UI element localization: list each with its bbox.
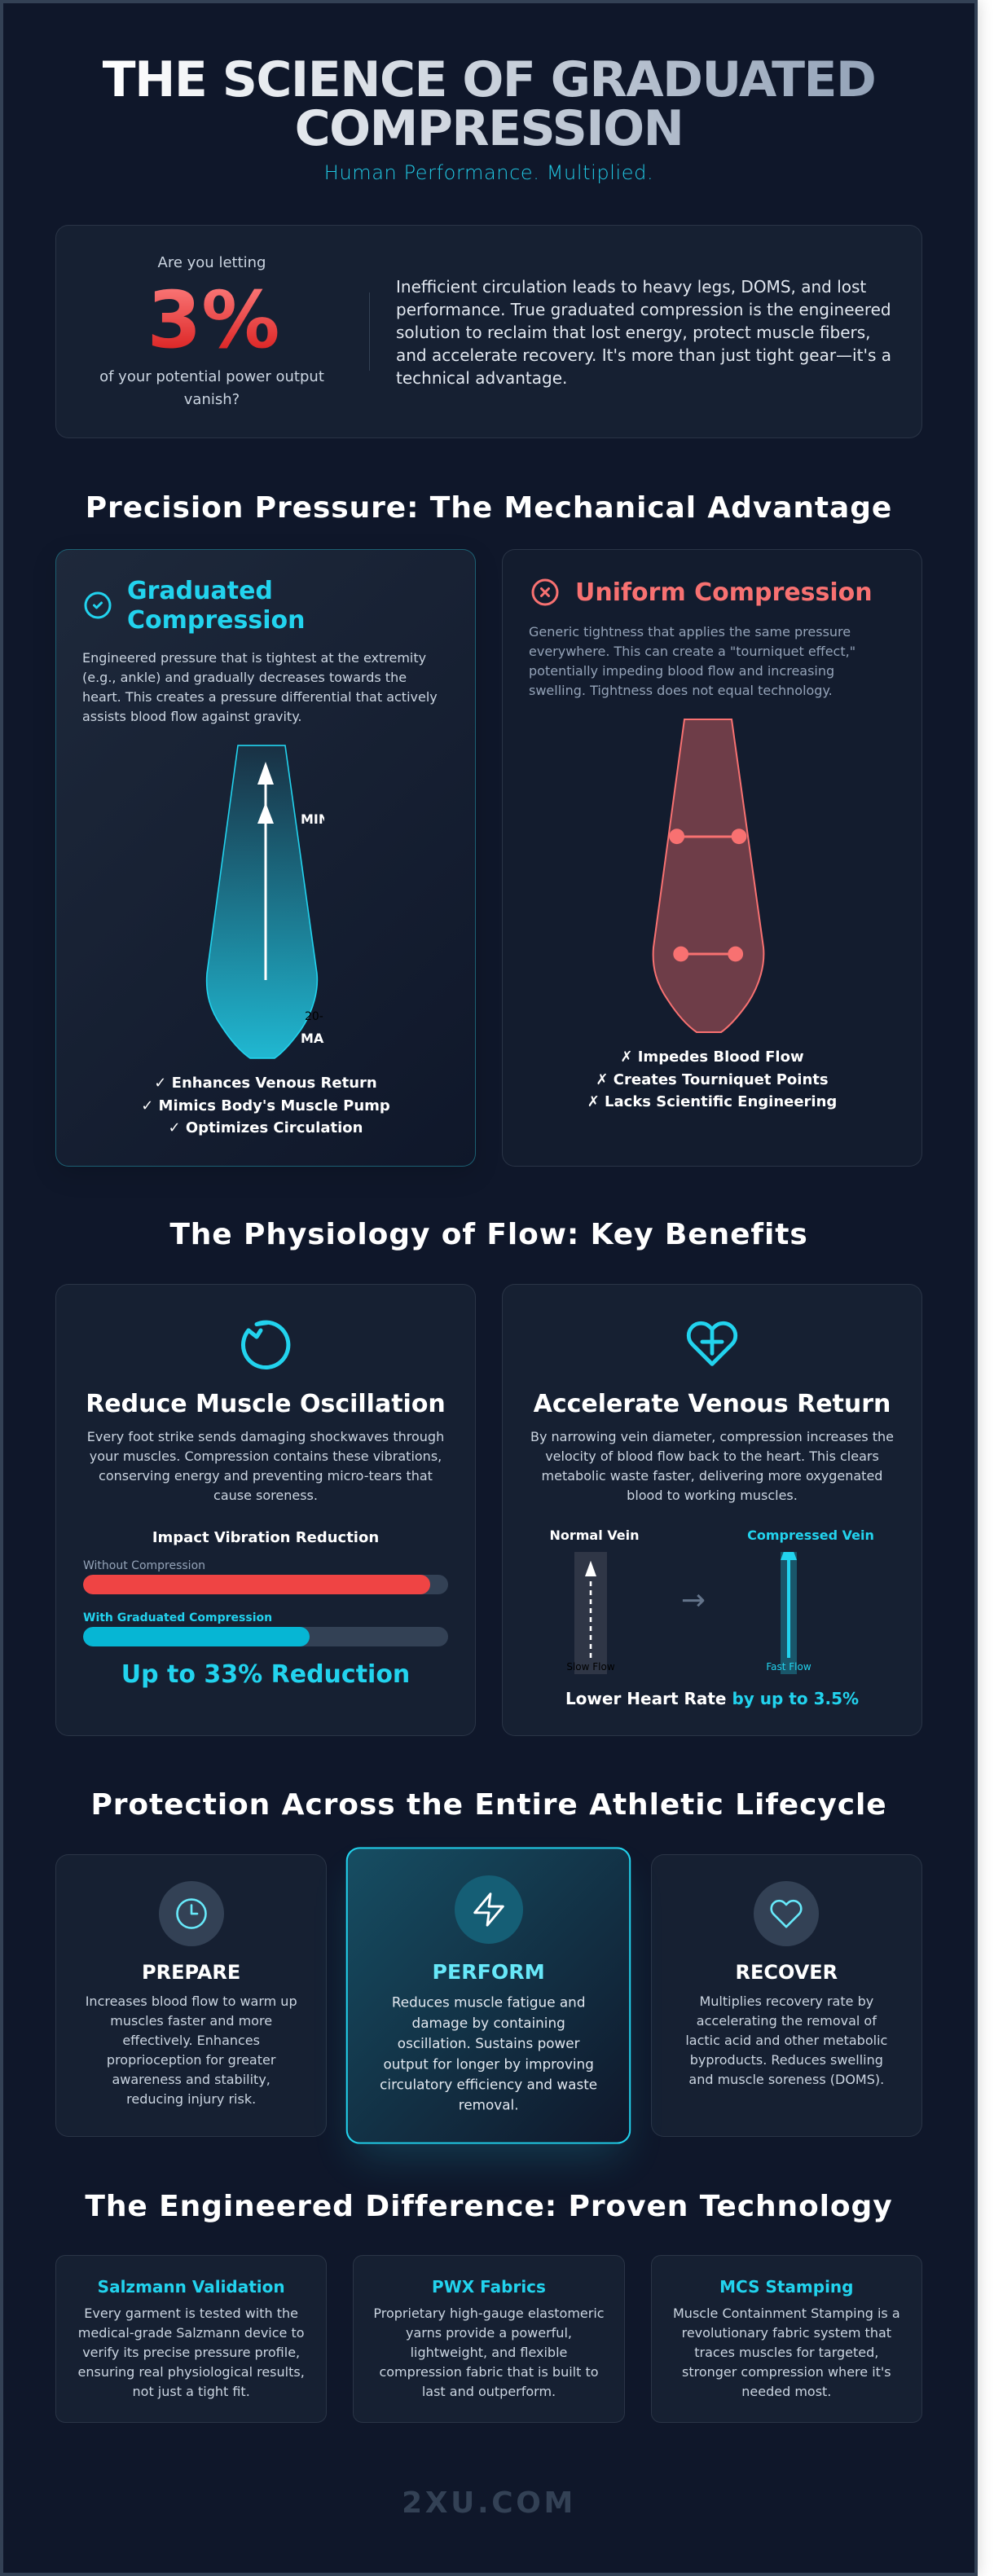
bar: without compression (83, 1575, 448, 1594)
heading: prepare: PREPARE (142, 1961, 240, 1984)
panel: graduated compression (55, 549, 476, 1167)
icon: lightning bolt (455, 1875, 523, 1944)
label: with graduated compression: With Graduated Compression (83, 1611, 272, 1624)
panel: salzmann validation (55, 2255, 327, 2423)
list: uniform drawbacks: ✗ Creates Tourniquet Points (596, 1071, 829, 1088)
text: oscillation description: Every foot strike sends damaging shockwaves through (87, 1429, 444, 1444)
text: power output question (99, 368, 324, 408)
text: venous description: By narrowing vein diameter, compression increases the (530, 1429, 894, 1444)
heading: mcs stamping: MCS Stamping (719, 2277, 854, 2297)
text: uniform description: swelling. Tightness does not equal technology. (529, 683, 833, 698)
icon: oscillation circle (241, 1320, 290, 1369)
text: prepare description: reducing injury risk. (126, 2091, 256, 2107)
compressed vein (766, 1552, 811, 1674)
text: recover description: Multiplies recovery rate by (699, 1994, 873, 2009)
normal vein (566, 1552, 615, 1674)
text: prepare description: effectively. Enhances (122, 2033, 260, 2048)
label: normal vein: Normal Vein (549, 1528, 640, 1543)
heading: engineered difference: The Engineered Difference: Proven Technology (85, 2190, 893, 2223)
subtitle: Human Performance. Multiplied. (324, 161, 653, 184)
text: uniform description: everywhere. This can create a "tourniquet effect," (529, 644, 855, 659)
panel: prepare (55, 1854, 327, 2137)
tourniquet band: upper (669, 829, 746, 844)
heading: pwx fabrics: PWX Fabrics (432, 2277, 546, 2297)
text: recover description: lactic acid and other metabolic (685, 2033, 887, 2048)
chart: graduated leg diagram (205, 745, 324, 1059)
text: pwx description: Proprietary high-gauge elastomeric (373, 2306, 605, 2321)
text: prepare description (86, 1994, 297, 2107)
footer: 2xu.com: 2XU.COM (402, 2486, 576, 2520)
text: pwx description (373, 2306, 605, 2399)
text: recover description: byproducts. Reduces swelling (690, 2052, 883, 2068)
heading: perform: PERFORM (433, 1960, 545, 1984)
text: uniform description: Generic tightness that applies the same pressure (529, 624, 851, 640)
bar: with graduated compression (83, 1627, 448, 1646)
heading: graduated compression: Graduated (127, 577, 273, 605)
text: mcs description (673, 2306, 900, 2399)
text: pwx description: lightweight, and flexible (411, 2345, 567, 2360)
text: perform description (380, 1994, 597, 2113)
list: uniform drawbacks (587, 1048, 837, 1110)
text: mcs description: needed most. (741, 2384, 831, 2399)
icon: heart with plus (686, 1321, 738, 1366)
text: graduated description (82, 650, 438, 724)
text: intro paragraph: technical advantage. (396, 368, 567, 388)
flow arrow (257, 762, 274, 980)
text: perform description: Reduces muscle fatigue and (392, 1994, 586, 2011)
text: salzmann description: medical-grade Salzmann device to (78, 2325, 305, 2341)
list: graduated benefits: ✓ Enhances Venous Return (154, 1075, 377, 1092)
panel: perform (346, 1847, 631, 2144)
normal vein: Slow Flow (566, 1661, 615, 1673)
stat: 3%: 3% (147, 275, 279, 366)
heading: salzmann validation: Salzmann Validation (98, 2277, 285, 2297)
divider (369, 292, 370, 371)
panel: reduce muscle oscillation (55, 1284, 476, 1736)
text: venous description (530, 1429, 894, 1503)
text: mcs description: revolutionary fabric system that (682, 2325, 891, 2341)
list: graduated benefits (141, 1075, 390, 1136)
text: mcs description: Muscle Containment Stamping is a (673, 2306, 900, 2321)
text: salzmann description: not just a tight fit. (133, 2384, 250, 2399)
text: prepare description: proprioception for greater (107, 2052, 275, 2068)
text: power output question: of your potential power output (99, 368, 324, 385)
text: prepare description: awareness and stability, (112, 2072, 270, 2087)
text: power output question: vanish? (184, 391, 240, 408)
panel: hook statistic and intro (55, 225, 922, 438)
leg shape (653, 719, 763, 1032)
heading: athletic lifecycle: Protection Across the Entire Athletic Lifecycle (90, 1788, 887, 1822)
heading: accelerate venous return: Accelerate Venous Return (534, 1390, 891, 1418)
text: intro paragraph: performance. True graduated compression is the engineered (396, 300, 891, 319)
text: prepare description: muscles faster and more (110, 2013, 272, 2029)
text: intro paragraph: solution to reclaim that lost energy, protect muscle fibers, (396, 323, 871, 342)
panel: pwx fabrics (353, 2255, 625, 2423)
heading: graduated compression (127, 577, 305, 635)
text: are you letting: Are you letting (158, 254, 266, 271)
text: oscillation description (87, 1429, 444, 1503)
arrow: normal to compressed: → (681, 1584, 706, 1617)
leg shape (207, 745, 317, 1058)
callout: lower heart rate: Lower Heart Rate by up to 3.5% (565, 1689, 859, 1708)
panel: recover (651, 1854, 922, 2137)
heading: reduce muscle oscillation: Reduce Muscle Oscillation (86, 1390, 446, 1418)
icon: x circle (531, 578, 559, 606)
title: THE SCIENCE OF GRADUATED (103, 51, 875, 108)
text: graduated description: heart. This creates a pressure differential that actively (82, 689, 438, 705)
label: compressed vein: Compressed Vein (747, 1528, 874, 1543)
panel: mcs stamping (651, 2255, 922, 2423)
text: intro paragraph: Inefficient circulation leads to heavy legs, DOMS, and lost (396, 277, 866, 297)
text: perform description: damage by containing (412, 2015, 565, 2031)
text: salzmann description: ensuring real physiological results, (78, 2364, 305, 2380)
list: graduated benefits: ✓ Mimics Body's Muscle Pump (141, 1097, 390, 1114)
heading: graduated compression: Compression (127, 606, 305, 635)
tourniquet band: lower (673, 947, 743, 961)
chart: uniform leg diagram (652, 719, 764, 1033)
heading: physiology of flow: The Physiology of Flow: Key Benefits (169, 1218, 808, 1251)
text: recover description (685, 1994, 887, 2087)
text: salzmann description: verify its precise pressure profile, (82, 2345, 300, 2360)
text: perform description: oscillation. Sustains power (398, 2035, 580, 2051)
text: prepare description: Increases blood flow to warm up (86, 1994, 297, 2009)
text: graduated description: (e.g., ankle) and gradually decreases towards the (82, 670, 407, 685)
compressed vein: Fast Flow (766, 1661, 811, 1673)
list: uniform drawbacks: ✗ Impedes Blood Flow (620, 1048, 804, 1066)
text: venous description: velocity of blood flow back to the heart. This clears (545, 1448, 879, 1464)
text: oscillation description: cause soreness. (213, 1488, 318, 1503)
panel: accelerate venous return (502, 1284, 922, 1736)
text: oscillation description: conserving energy and preventing micro-tears that (99, 1468, 433, 1484)
text: pwx description: compression fabric that is built to (379, 2364, 599, 2380)
title (103, 51, 875, 157)
text: uniform description: potentially impeding blood flow and increasing (529, 663, 834, 679)
text: perform description: removal. (459, 2097, 519, 2113)
text: mcs description: traces muscles for targeted, (694, 2345, 878, 2360)
heading: uniform compression: Uniform Compression (575, 578, 873, 607)
panel: uniform compression (502, 549, 922, 1167)
text: salzmann description (78, 2306, 305, 2399)
icon: check circle (85, 591, 111, 619)
stat: 3% (57, 281, 370, 359)
text: perform description: circulatory efficiency and waste (380, 2077, 597, 2093)
text: salzmann description: Every garment is tested with the (84, 2306, 298, 2321)
text: uniform description (529, 624, 855, 698)
title: COMPRESSION (295, 100, 683, 157)
list: uniform drawbacks: ✗ Lacks Scientific Engineering (587, 1093, 837, 1110)
callout: up to 33% reduction: Up to 33% Reduction (121, 1660, 410, 1689)
text: pwx description: last and outperform. (422, 2384, 556, 2399)
text: pwx description: yarns provide a powerful, (406, 2325, 572, 2341)
heading: chart title: Impact Vibration Reduction (152, 1529, 379, 1546)
label: without compression: Without Compression (83, 1559, 205, 1572)
text: venous description: metabolic waste faster, delivering more oxygenated (542, 1468, 882, 1484)
icon: clock (159, 1881, 224, 1946)
text: recover description: and muscle soreness (DOMS). (688, 2072, 884, 2087)
heading: precision pressure: Precision Pressure: The Mechanical Advantage (86, 491, 892, 525)
text: recover description: accelerating the removal of (697, 2013, 877, 2029)
list: graduated benefits: ✓ Optimizes Circulation (169, 1119, 363, 1136)
text: intro paragraph: and accelerate recovery. It's more than just tight gear—it's a (396, 345, 891, 365)
text: oscillation description: your muscles. Compression contains these vibrations, (90, 1448, 442, 1464)
heading: recover: RECOVER (735, 1961, 838, 1984)
text: graduated description: Engineered pressure that is tightest at the extremity (82, 650, 426, 666)
text: mcs description: stronger compression where it's (682, 2364, 891, 2380)
text: intro paragraph (396, 277, 891, 388)
chart: vein comparison (566, 1552, 811, 1674)
icon: heart (754, 1881, 819, 1946)
text: graduated description: assists blood flow against gravity. (82, 709, 301, 724)
text: venous description: blood to working muscles. (627, 1488, 798, 1503)
text: perform description: output for longer by improving (384, 2056, 594, 2072)
